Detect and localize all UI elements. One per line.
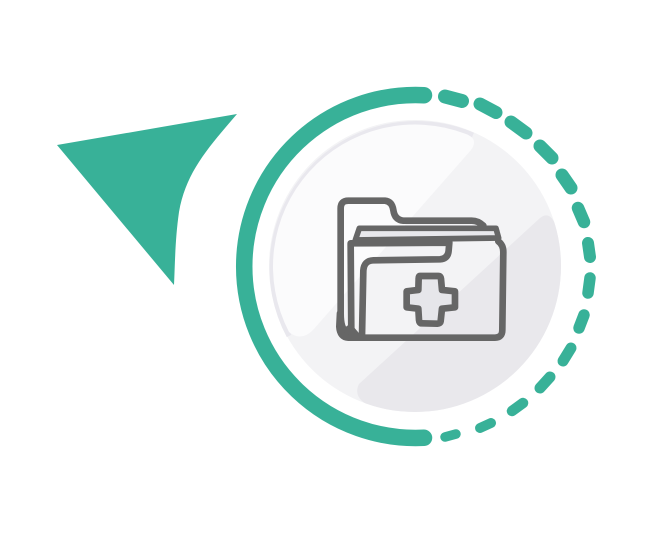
- folder tab sheet: [341, 201, 483, 334]
- panel: light grey disc: [269, 120, 561, 412]
- icon: teal pointer triangle: [57, 114, 237, 285]
- folder middle sheet: [355, 228, 499, 240]
- icon: medical cross: [407, 276, 455, 324]
- folder corner fill: [341, 323, 362, 337]
- disc rim highlight: [272, 123, 473, 336]
- folder front pocket: [351, 243, 449, 337]
- dashed teal progress arc: [445, 96, 590, 437]
- disc light sheen band: [273, 125, 474, 337]
- infographic: medical folder badge: [57, 86, 596, 446]
- folder body: [339, 241, 503, 338]
- solid teal progress arc: [244, 95, 424, 438]
- icon: medical folder: [339, 201, 503, 338]
